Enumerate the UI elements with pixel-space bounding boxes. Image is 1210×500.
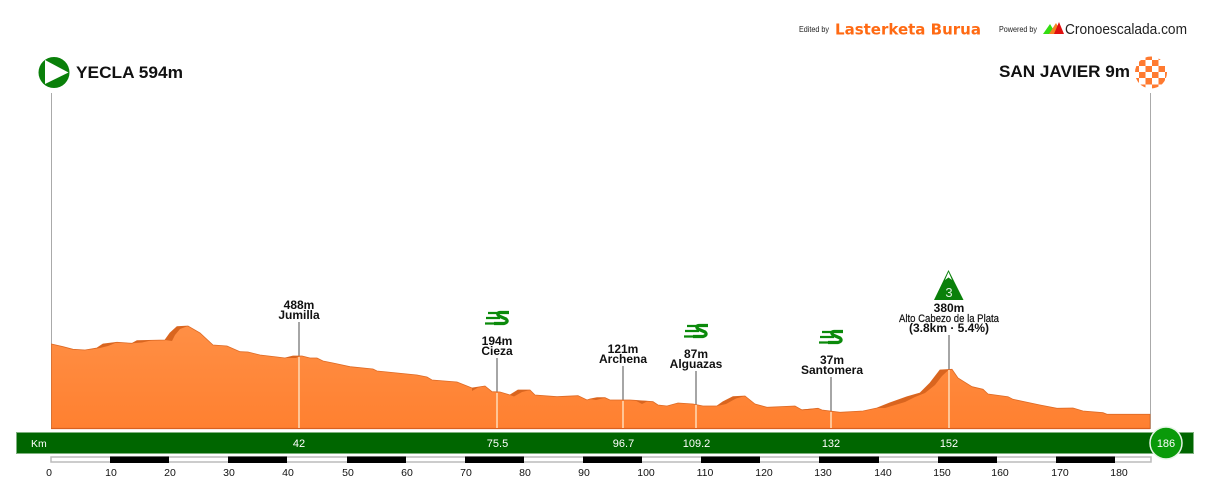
credits: edited by: Edited by [799,25,829,34]
label: Alto Cabezo de la Plata: Alto Cabezo de la Plata [899,313,1000,325]
km ruler: 150 [933,467,951,479]
km bar: 109.2 [683,438,710,450]
pale marker lines [299,357,949,428]
icon: finish checkered flag [1135,56,1167,88]
km bar: 96.7 [613,438,634,450]
km ruler: 110 [697,467,714,479]
profile base line [51,428,1150,430]
km ruler: 140 [874,467,892,479]
credits: edited by: Lasterketa Burua [835,20,981,38]
km ruler: 10 [105,467,117,479]
label: Alto Cabezo de la Plata: 380m [934,301,964,315]
km bar: 132 [822,438,840,450]
label: Santomera: Santomera [801,363,863,377]
km ruler: 30 [223,467,235,479]
label: Cieza [481,334,513,358]
icon: start [38,57,70,88]
km bar [16,427,1194,459]
label: Santomera: 37m [820,353,844,367]
label: Alto Cabezo de la Plata [899,301,1000,335]
icon: sprint Cieza [485,312,509,324]
marker stems [299,322,949,412]
distance end badge: 186 [1157,438,1175,450]
label: Archena: 121m [608,342,638,356]
km ruler: 120 [755,467,773,479]
labels [278,298,1000,377]
km ruler: 20 [164,467,176,479]
km ruler: 50 [342,467,354,479]
credits: powered by: Powered by [999,25,1037,34]
km bar: 42 [293,438,305,450]
elevation profile [51,326,1150,428]
climb shading [88,326,949,410]
label: Archena [599,342,647,366]
label: Jumilla: Jumilla [278,308,320,322]
credits: powered by [999,22,1187,38]
km ruler: 70 [460,467,472,479]
icon: sprint Santomera [819,332,843,342]
label: Jumilla [278,298,320,322]
km ruler: 40 [282,467,294,479]
icon: category 3 climb [934,270,964,300]
km bar: 152 [940,438,958,450]
km ruler: 170 [1051,467,1069,479]
km ruler: 80 [519,467,531,479]
distance end badge [1150,427,1182,459]
km bar: Km [31,438,47,450]
finish label: SAN JAVIER 9m [999,62,1130,81]
label: Cieza: Cieza [481,344,513,358]
label: Santomera [801,353,863,377]
label: Alguazas [670,347,723,371]
km ruler: 60 [401,467,413,479]
km ruler: 0 [46,467,52,479]
icon: category 3 climb: 3 [945,285,953,300]
km ruler: 90 [578,467,590,479]
km ruler: 100 [637,467,655,479]
label: Alguazas: 87m [684,347,708,361]
km bar: 75.5 [487,438,508,450]
km ruler: 180 [1110,467,1128,479]
km ruler [46,456,1151,479]
label: Archena: Archena [599,352,647,366]
label: Alto Cabezo de la Plata: (3.8km · 5.4%) [909,321,989,335]
start line [50,93,52,429]
label: Alguazas: Alguazas [670,357,723,371]
icon: sprint Alguazas [684,326,708,336]
km ruler: 130 [814,467,832,479]
start label: YECLA 594m [76,63,183,82]
label: Cieza: 194m [482,334,512,348]
credits: powered by: Cronoescalada.com [1065,22,1187,38]
km ruler: 160 [991,467,1009,479]
finish line [1150,93,1152,429]
label: Jumilla: 488m [284,298,314,312]
